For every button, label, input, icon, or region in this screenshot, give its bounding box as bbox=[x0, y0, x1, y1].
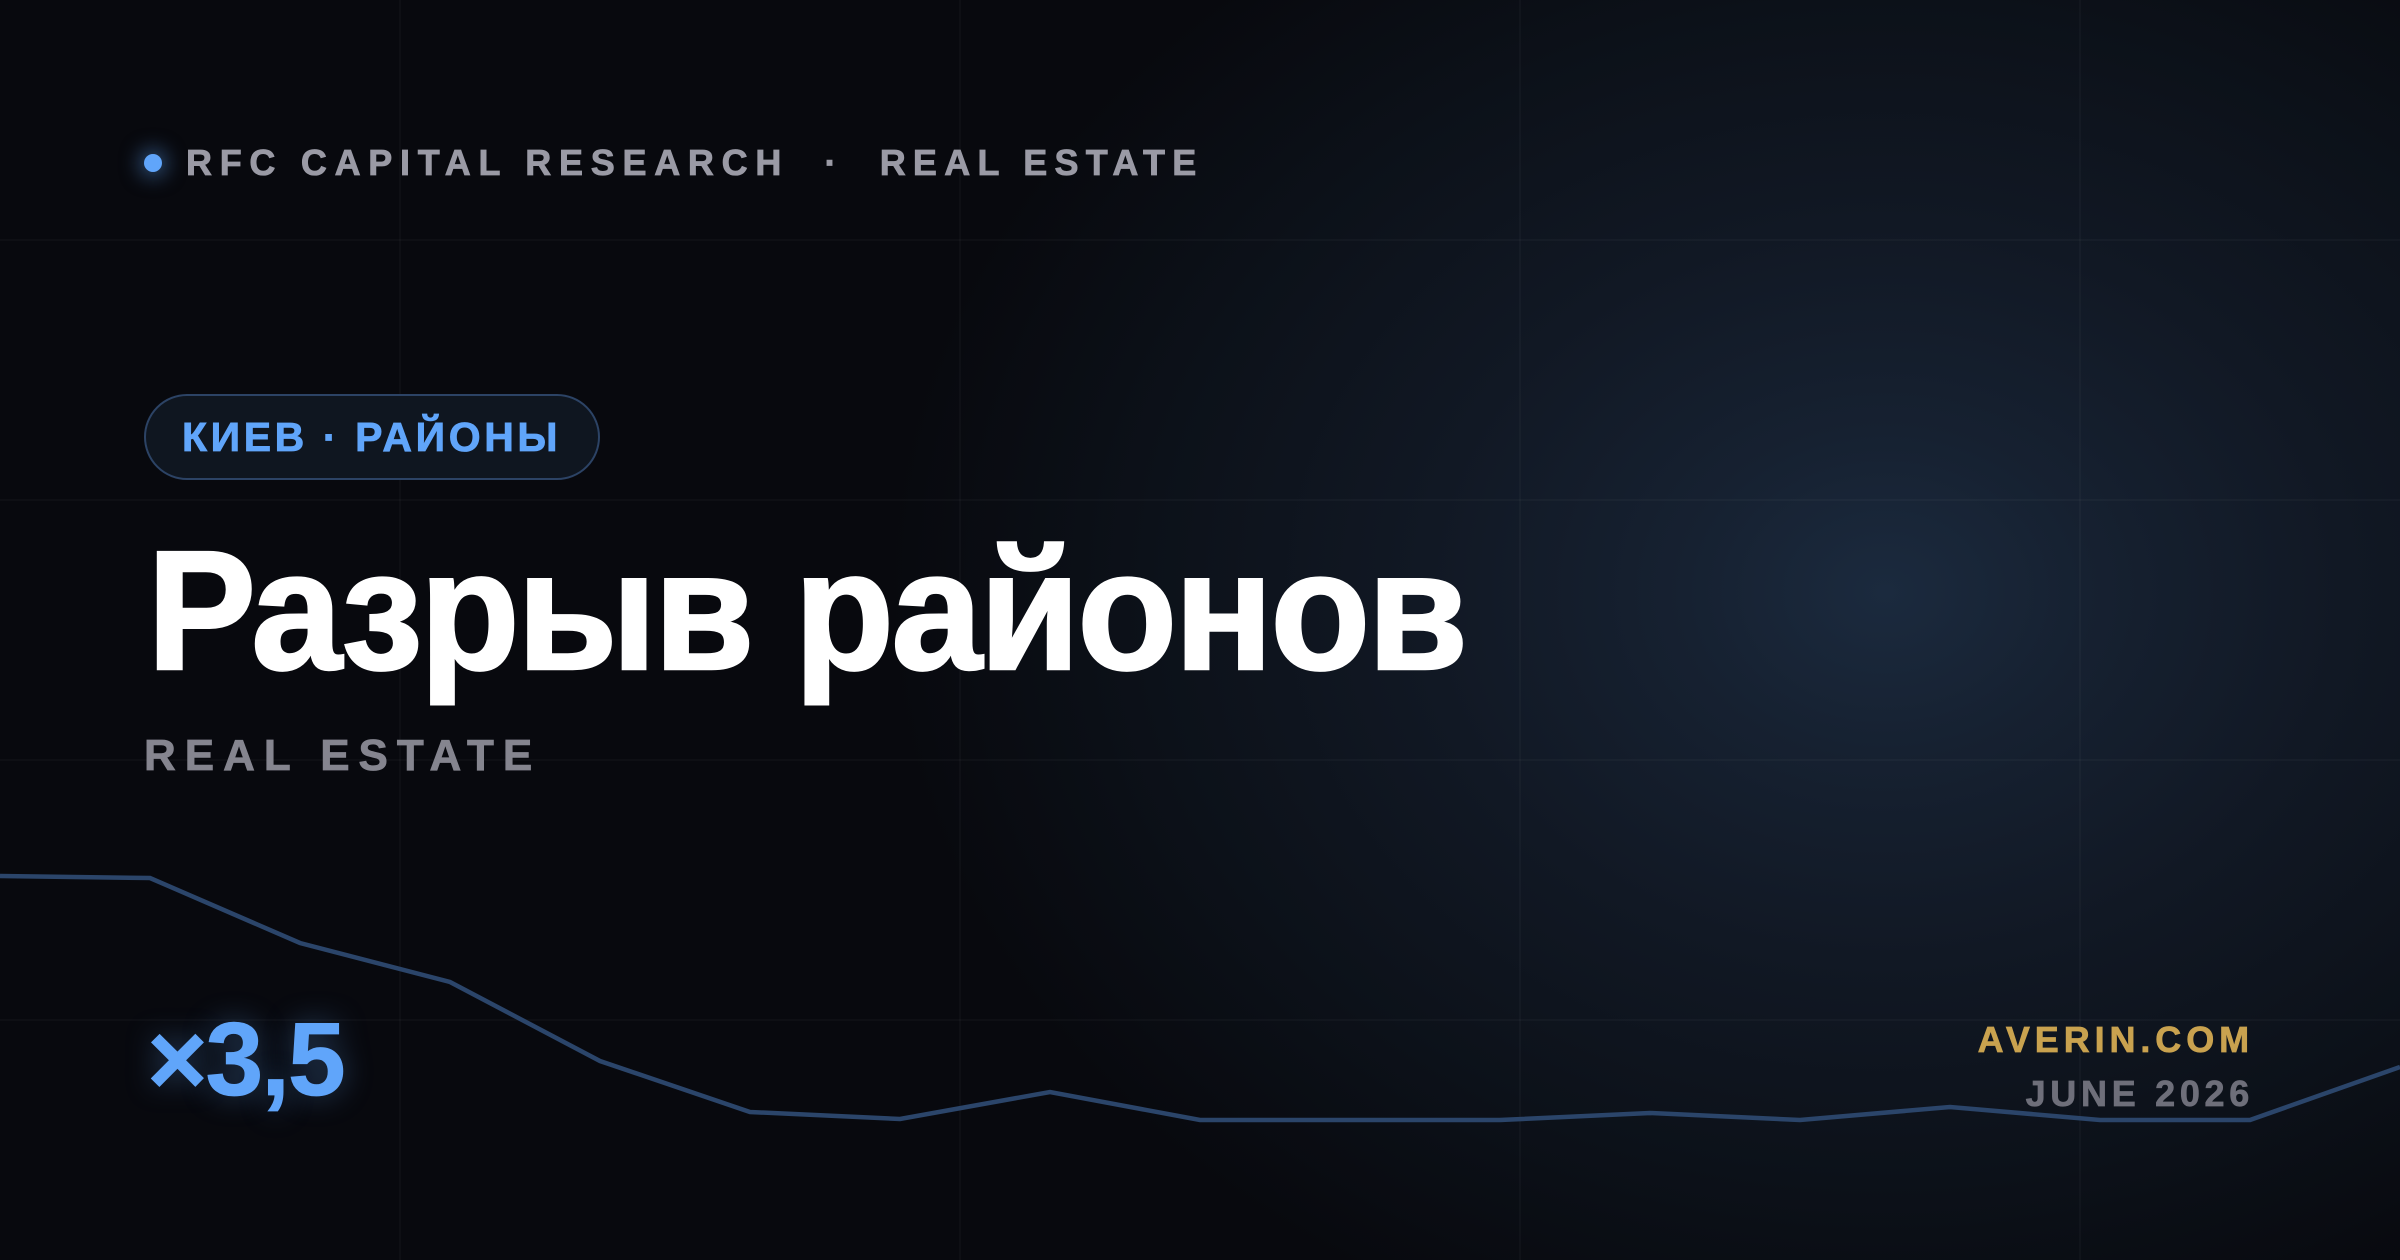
title: Разрыв районов bbox=[147, 516, 1465, 706]
date: JUNE 2026 bbox=[2026, 1073, 2254, 1114]
header text: RFC CAPITAL RESEARCH · REAL ESTATE bbox=[186, 142, 1203, 183]
stat value: ×3,5 bbox=[147, 1002, 344, 1118]
badge bbox=[144, 394, 600, 480]
header line bbox=[129, 139, 1203, 187]
subtitle: REAL ESTATE bbox=[144, 731, 541, 780]
icon: status dot bbox=[144, 154, 162, 172]
badge text: КИЕВ · РАЙОНЫ bbox=[182, 414, 561, 460]
source: AVERIN.COM bbox=[1978, 1019, 2254, 1060]
